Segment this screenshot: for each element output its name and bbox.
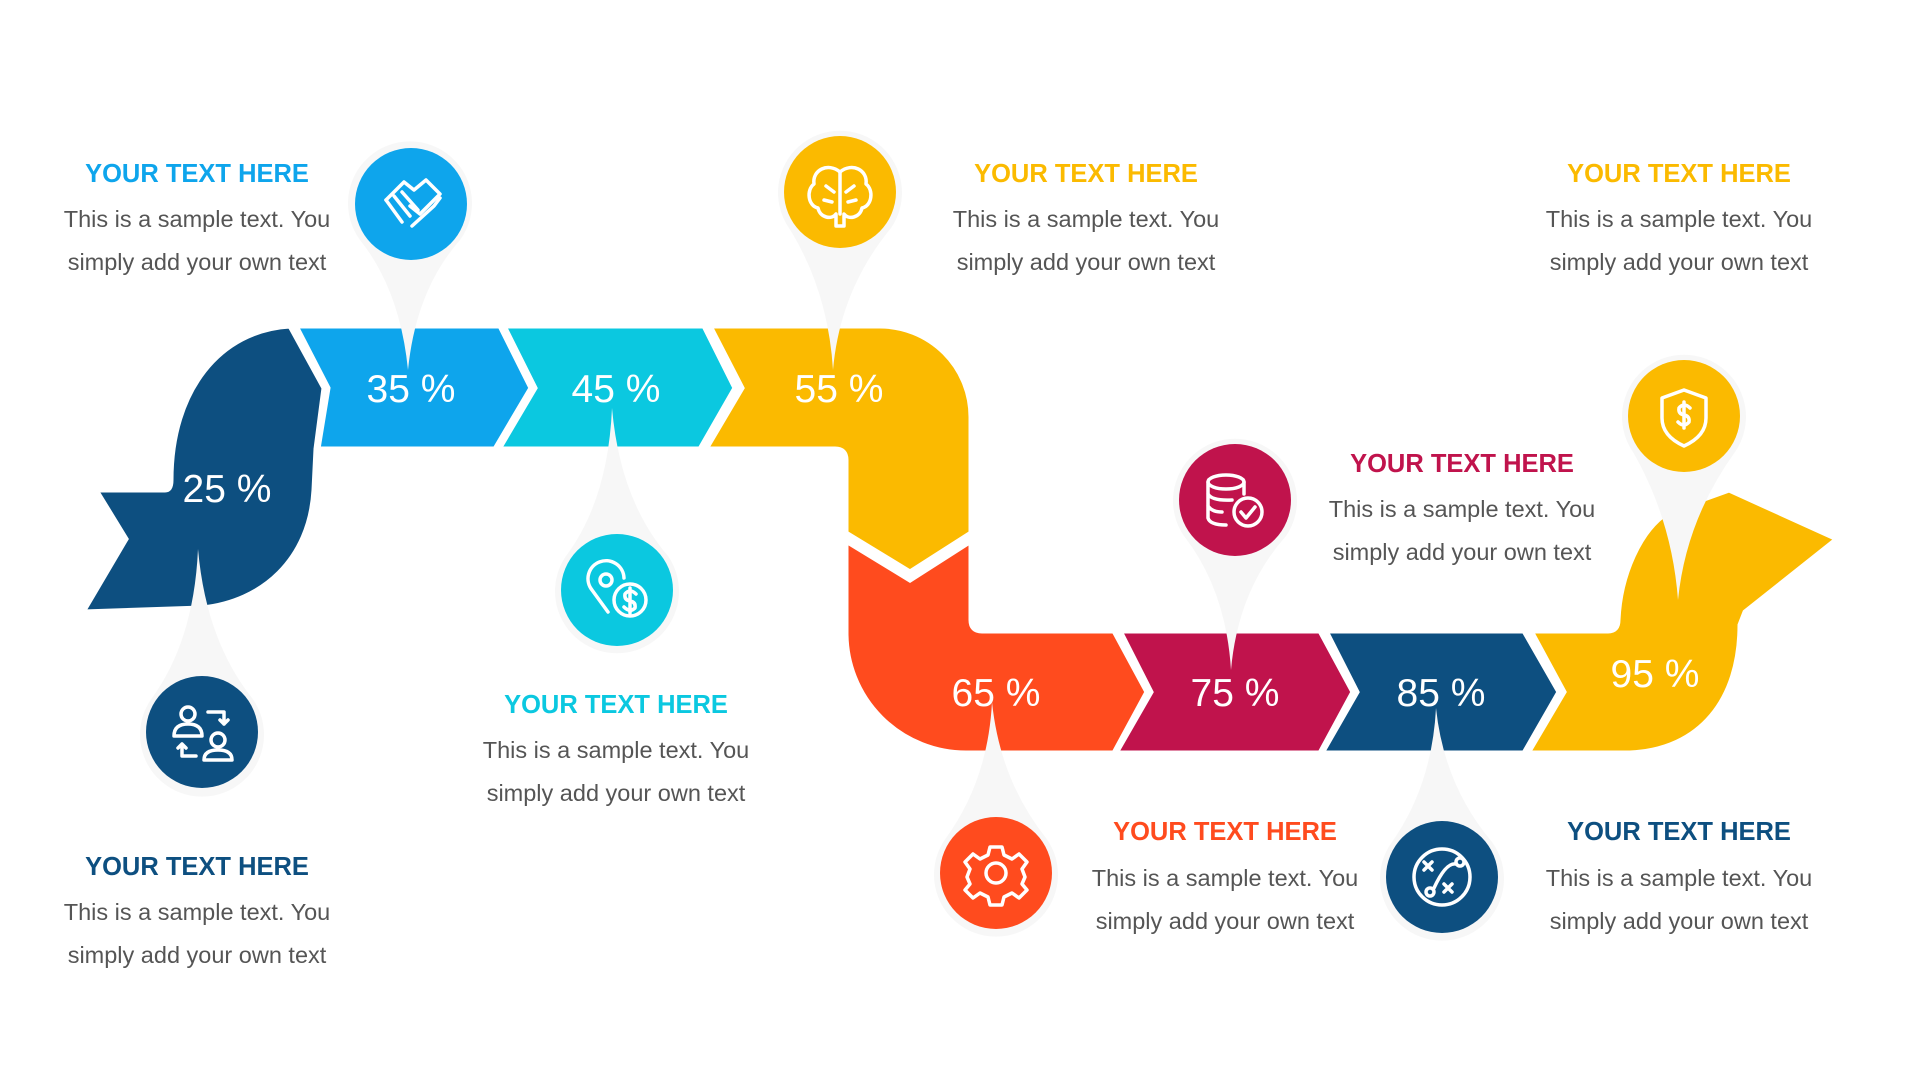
- text block 6: This is a sample text. You: [1329, 496, 1595, 522]
- percent labels: [183, 368, 1699, 715]
- percent labels: 45 %: [572, 368, 660, 411]
- pin 25 people: [140, 549, 264, 797]
- pin 85 strategy: [1380, 708, 1504, 941]
- percent labels: 55 %: [795, 368, 883, 411]
- segment 65%: [846, 541, 1147, 753]
- text block 8: simply add your own text: [1550, 249, 1809, 275]
- icon: handshake: [386, 180, 440, 226]
- text block 1: simply add your own text: [68, 249, 327, 275]
- text block 0: [64, 853, 330, 968]
- icon: strategy: [1414, 849, 1470, 905]
- pin 45 location money: [555, 408, 679, 653]
- percent labels: 25 %: [183, 468, 271, 511]
- text block 8: This is a sample text. You: [1546, 206, 1812, 232]
- percent labels: 65 %: [952, 672, 1040, 715]
- pin 95 shield: [1622, 355, 1746, 600]
- text block 6: [1329, 450, 1595, 565]
- text block 2: simply add your own text: [487, 780, 746, 806]
- icon: location coin: [588, 561, 646, 616]
- text block 3: simply add your own text: [957, 249, 1216, 275]
- segment 85%: [1322, 631, 1559, 753]
- text block 7: YOUR TEXT HERE: [1567, 818, 1791, 846]
- text block 0: YOUR TEXT HERE: [85, 853, 309, 881]
- percent labels: 95 %: [1611, 653, 1699, 696]
- percent labels: 85 %: [1397, 672, 1485, 715]
- segment 55%: [706, 326, 971, 572]
- text block 5: YOUR TEXT HERE: [1113, 818, 1337, 846]
- text block 1: YOUR TEXT HERE: [85, 160, 309, 188]
- text block 0: This is a sample text. You: [64, 899, 330, 925]
- percent labels: 35 %: [367, 368, 455, 411]
- path band: [83, 326, 1837, 753]
- icon: gear: [965, 847, 1027, 905]
- text block 8: [1546, 160, 1812, 275]
- text block 2: This is a sample text. You: [483, 737, 749, 763]
- text block 3: [953, 160, 1219, 275]
- text block 1: This is a sample text. You: [64, 206, 330, 232]
- icon: people exchange: [174, 707, 232, 760]
- pin 55 brain: [778, 131, 902, 370]
- percent labels: 75 %: [1191, 672, 1279, 715]
- text block 8: YOUR TEXT HERE: [1567, 160, 1791, 188]
- segment 35%: [296, 326, 531, 449]
- text block 3: This is a sample text. You: [953, 206, 1219, 232]
- text block 7: This is a sample text. You: [1546, 865, 1812, 891]
- icon: database check: [1208, 475, 1262, 526]
- text block 0: simply add your own text: [68, 942, 327, 968]
- text block 2: YOUR TEXT HERE: [504, 691, 728, 719]
- segment 75%: [1116, 631, 1353, 753]
- text block 2: [483, 691, 749, 806]
- text block 6: simply add your own text: [1333, 539, 1592, 565]
- text block 6: YOUR TEXT HERE: [1350, 450, 1574, 478]
- text block 5: This is a sample text. You: [1092, 865, 1358, 891]
- icon: brain: [809, 168, 871, 226]
- text block 5: simply add your own text: [1096, 908, 1355, 934]
- text block 7: [1546, 818, 1812, 934]
- text block 1: [64, 160, 330, 275]
- text block 3: YOUR TEXT HERE: [974, 160, 1198, 188]
- icon: shield dollar: [1662, 390, 1706, 446]
- pin 35 handshake: [348, 141, 472, 370]
- pin 65 gear: [934, 702, 1058, 937]
- text block 5: [1092, 818, 1358, 934]
- text block 7: simply add your own text: [1550, 908, 1809, 934]
- segment 25%: [83, 326, 324, 612]
- pin 75 database: [1173, 439, 1297, 670]
- segment 95%: [1528, 490, 1837, 753]
- segment 45%: [499, 326, 735, 449]
